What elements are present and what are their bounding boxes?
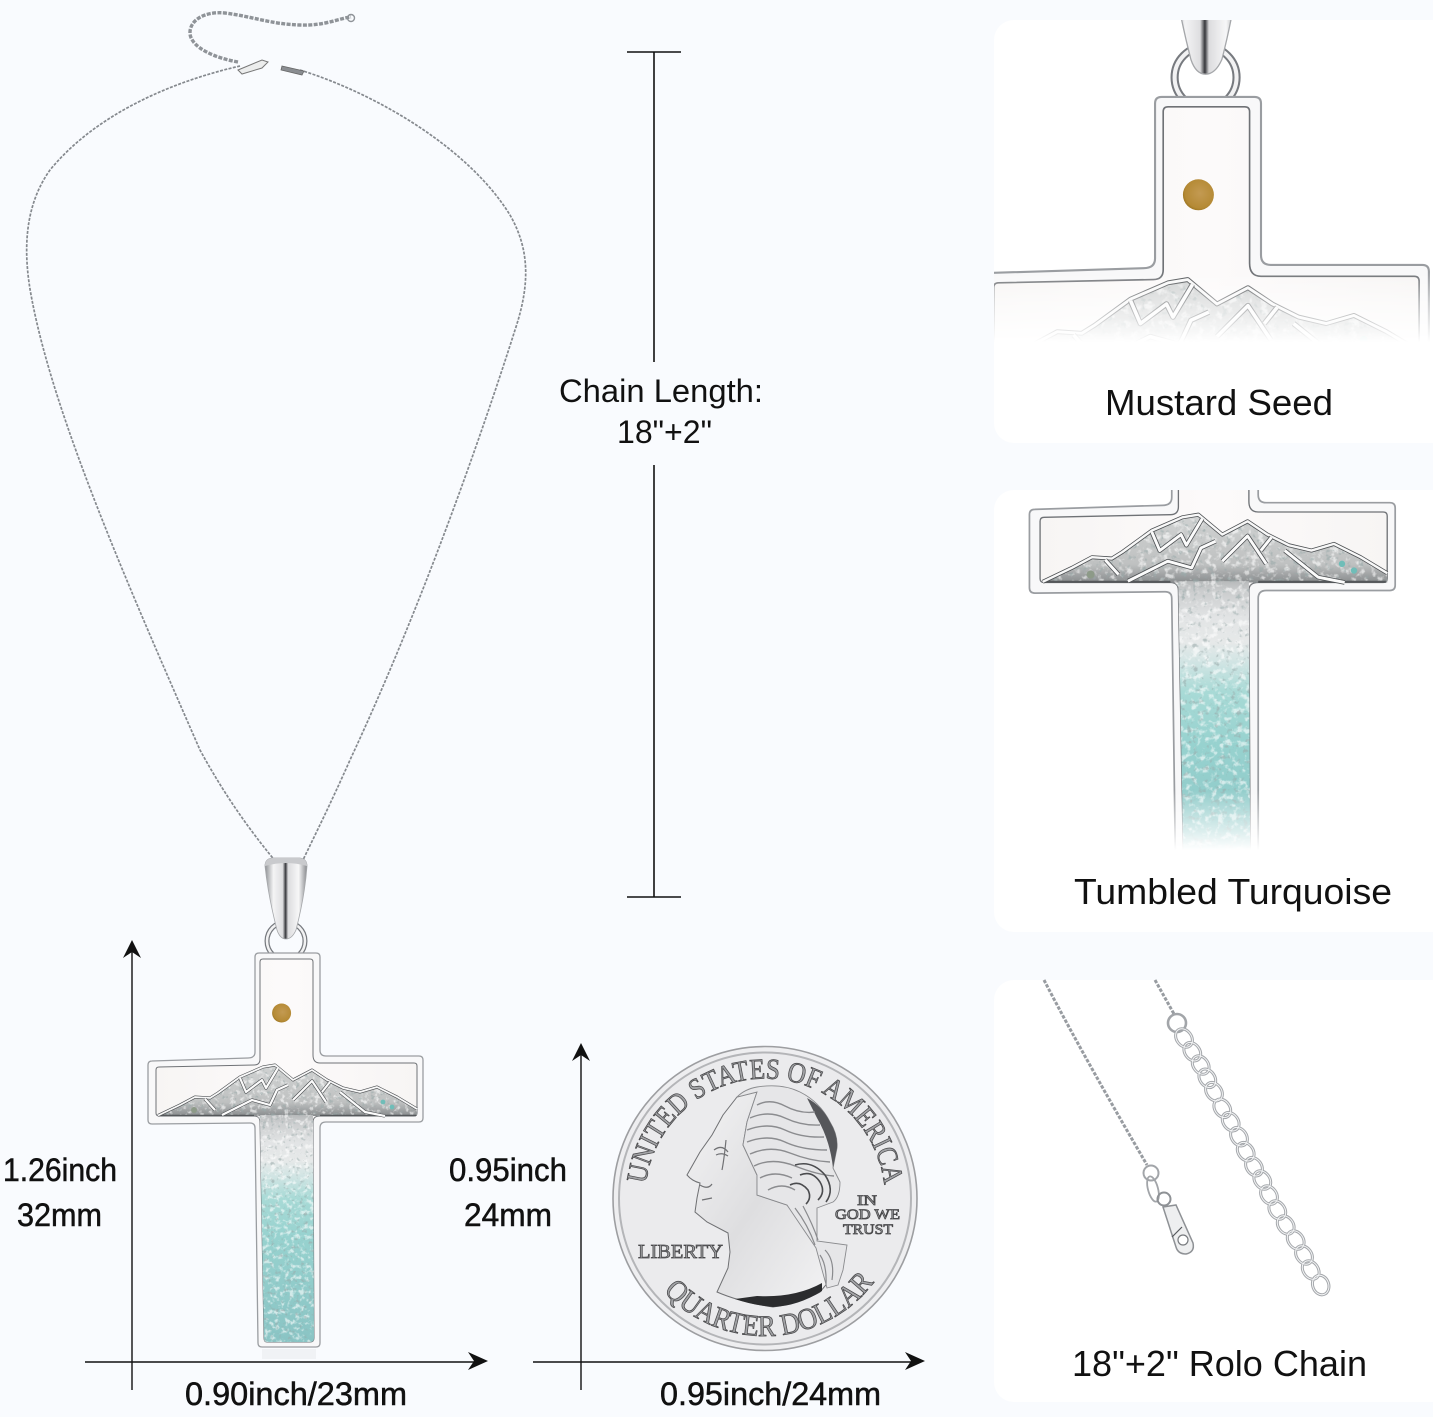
mustard seed label: Mustard Seed bbox=[1105, 382, 1333, 423]
panel: rolo chain bbox=[994, 980, 1433, 1402]
coin dimension arrows bbox=[533, 1043, 925, 1390]
cross height label: 1.26inch bbox=[3, 1152, 117, 1188]
coin height label: 24mm bbox=[464, 1197, 552, 1233]
mustard seed cross closeup bbox=[994, 20, 1430, 338]
quarter coin bbox=[612, 1046, 918, 1352]
coin: motto text bbox=[638, 1193, 900, 1263]
tumbled turquoise label: Tumbled Turquoise bbox=[1074, 871, 1392, 912]
coin width label: 0.95inch/24mm bbox=[660, 1376, 881, 1412]
coin inscription: bottom: QUARTER DOLLAR bbox=[666, 1273, 875, 1336]
rolo chain label: 18"+2" Rolo Chain bbox=[1072, 1343, 1367, 1384]
main cross pendant bbox=[148, 858, 423, 1359]
coin height label: 0.95inch bbox=[449, 1152, 567, 1188]
chain length label: 18"+2" bbox=[617, 414, 712, 450]
dimension: chain length line bottom bbox=[627, 465, 681, 897]
cross height label bbox=[3, 1152, 117, 1233]
necklace chain with extender bbox=[27, 13, 526, 862]
cross height label: 32mm bbox=[17, 1197, 102, 1233]
dimension: chain length line top bbox=[627, 52, 681, 362]
turquoise cross closeup bbox=[1028, 490, 1396, 846]
chain length label bbox=[559, 373, 763, 450]
coin: motto text: GOD WE bbox=[835, 1207, 900, 1223]
coin inscription: top: UNITED STATES OF AMERICA bbox=[626, 1059, 902, 1186]
coin: motto text: IN bbox=[857, 1193, 877, 1209]
rolo chain closeup bbox=[1044, 980, 1332, 1297]
chain length label: Chain Length: bbox=[559, 373, 763, 409]
coin: motto text: TRUST bbox=[843, 1222, 893, 1238]
panel: tumbled turquoise bbox=[1028, 490, 1396, 912]
coin height label bbox=[449, 1152, 567, 1233]
coin: motto text: LIBERTY bbox=[638, 1241, 723, 1263]
cross width label: 0.90inch/23mm bbox=[185, 1376, 407, 1412]
panel: mustard seed bbox=[994, 20, 1430, 416]
coin: washington bust bbox=[687, 1086, 847, 1307]
cross dimension arrows bbox=[85, 940, 488, 1390]
